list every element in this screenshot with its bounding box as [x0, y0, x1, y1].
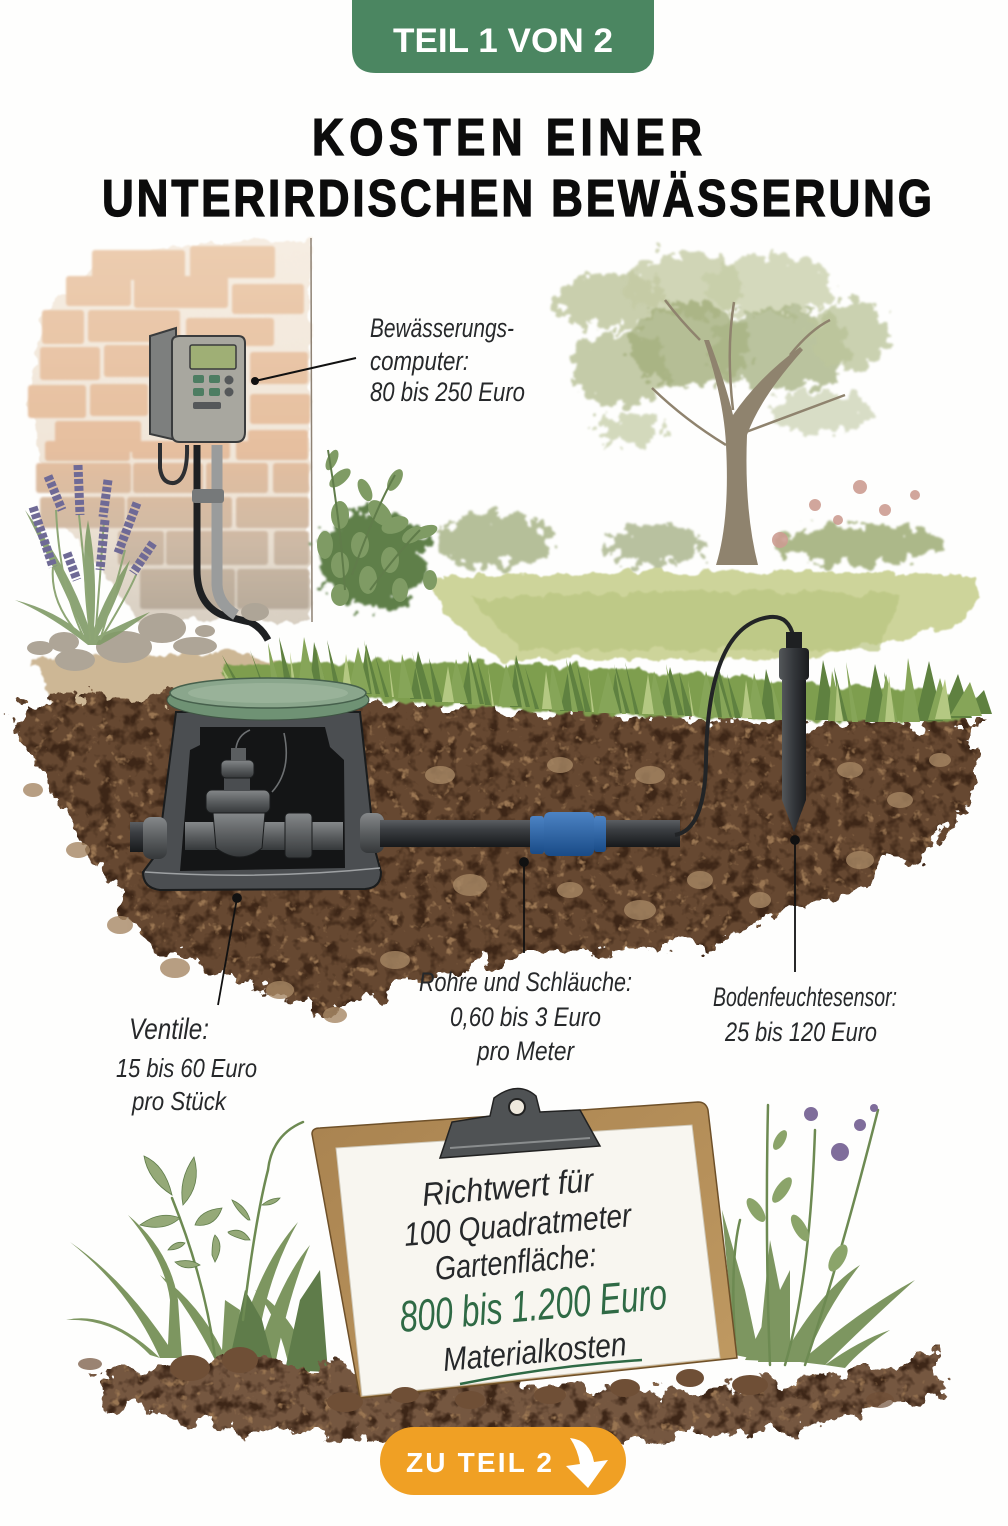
lavender: leaves — [15, 510, 150, 645]
illustration: bottom soil mound — [100, 1352, 950, 1442]
foreground clods — [78, 1347, 894, 1412]
header pill: part 1 of 2: TEIL 1 VON 2 — [393, 22, 613, 60]
label: computer cost: computer: — [370, 346, 469, 376]
label: pipes cost: pro Meter — [476, 1036, 575, 1066]
cable: black conduit — [197, 445, 268, 640]
icon: down arrow — [566, 1438, 608, 1488]
label: computer cost: 80 bis 250 Euro — [370, 377, 525, 407]
label: valves cost: Ventile: — [129, 1013, 209, 1046]
grass blades: light — [220, 652, 951, 722]
valve box: lid — [167, 678, 369, 720]
illustration: sensor and cable — [675, 617, 809, 835]
illustration: grass strip — [220, 637, 992, 722]
valve box: left pipe stub — [130, 817, 167, 859]
header pill: part 1 of 2 — [352, 0, 654, 73]
label: valves cost — [116, 1013, 257, 1116]
label: sensor cost: 25 bis 120 Euro — [724, 1017, 877, 1047]
clipboard — [312, 1088, 737, 1398]
label: sensor cost — [713, 982, 897, 1047]
label arrow: computer — [251, 358, 356, 385]
illustration: soil — [15, 696, 975, 1023]
illustration: tree — [555, 253, 890, 565]
valve box: inner pipe — [185, 822, 343, 850]
label: valves cost: 15 bis 60 Euro — [116, 1053, 257, 1083]
title — [102, 110, 932, 228]
valve box: body — [143, 712, 381, 890]
clipboard: text: 800 bis 1.200 Euro — [398, 1270, 669, 1342]
button: to part 2 — [380, 1427, 626, 1495]
title: KOSTEN EINER — [312, 110, 702, 167]
left plant: leaves — [140, 1156, 280, 1268]
illustration: lavender — [15, 465, 153, 645]
label: pipes cost: Rohre und Schläuche: — [419, 967, 632, 997]
label: pipes cost — [419, 967, 632, 1066]
illustration: left plant — [66, 1122, 328, 1372]
illustration: brick wall — [28, 238, 312, 622]
clipboard: text — [398, 1161, 669, 1384]
illustration: shrub beside wall — [316, 448, 439, 610]
clipboard: metal clip — [440, 1088, 600, 1158]
grass blades: dark — [222, 637, 992, 722]
valve box: window — [180, 727, 345, 871]
illustration: right plant — [722, 1104, 915, 1368]
label: sensor cost: Bodenfeuchtesensor: — [713, 982, 897, 1012]
label: pipes cost: 0,60 bis 3 Euro — [450, 1002, 601, 1032]
illustration: pipe — [360, 812, 680, 856]
illustration: lawn — [430, 571, 980, 660]
illustration: background shrubs and flowers — [437, 480, 945, 566]
clipboard: paper — [336, 1125, 720, 1396]
clipboard: text: 100 Quadratmeter — [402, 1196, 634, 1253]
clipboard: wooden board — [312, 1102, 737, 1398]
grass blades: mid — [220, 637, 982, 722]
valve box: union — [285, 813, 312, 858]
button: to part 2: ZU TEIL 2 — [406, 1447, 552, 1478]
clipboard: text: Gartenfläche: — [433, 1236, 598, 1287]
left plant: grass — [66, 1215, 310, 1372]
illustration: valve box — [130, 678, 381, 890]
clipboard: text: Materialkosten — [441, 1325, 628, 1378]
label: valves cost: pro Stück — [131, 1086, 228, 1116]
clipboard: text: Richtwert für — [420, 1161, 597, 1213]
leader lines — [218, 836, 799, 1005]
label: computer cost: Bewässerungs- — [370, 313, 514, 343]
label: computer cost — [370, 313, 525, 407]
illustration: irrigation computer — [150, 328, 268, 640]
cable: grey conduit — [217, 445, 236, 615]
illustration: ground at foot of wall — [27, 603, 320, 715]
valve box: valve — [206, 730, 286, 857]
title: UNTERIRDISCHEN BEWÄSSERUNG — [102, 171, 932, 228]
